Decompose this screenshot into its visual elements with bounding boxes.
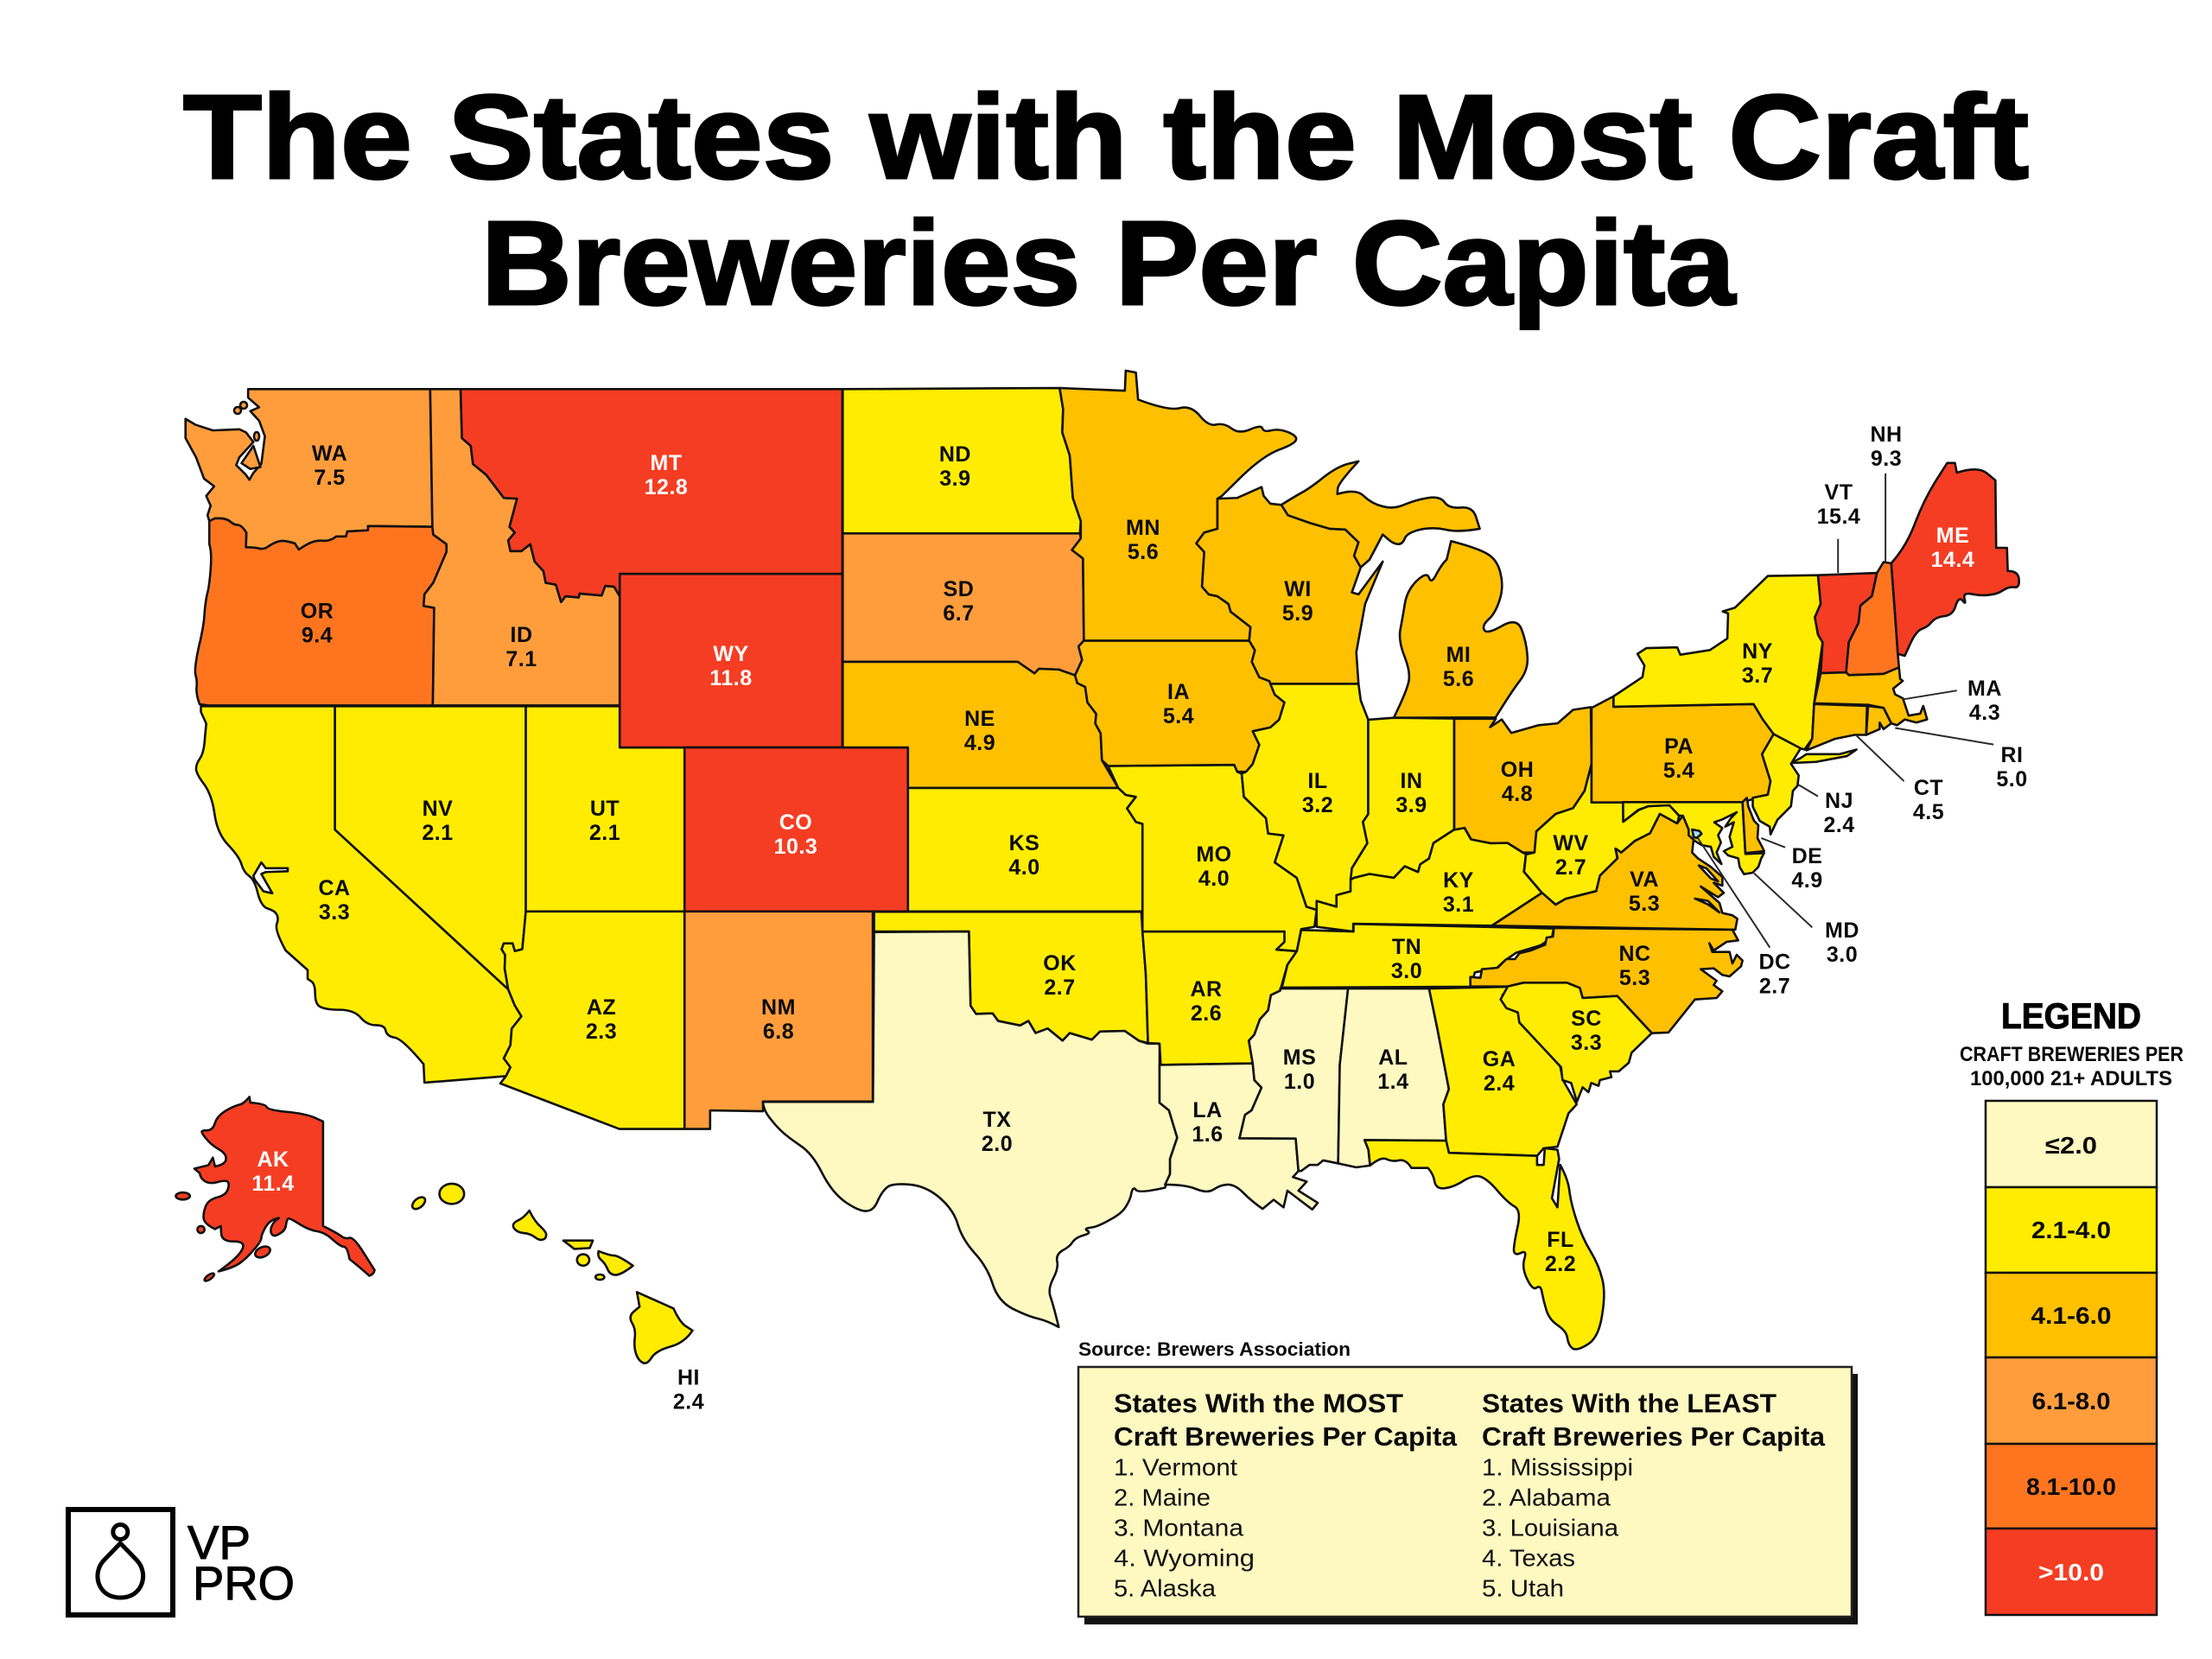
state: Illinois: 3.2 — [1302, 793, 1333, 817]
state: Illinois: IL — [1307, 769, 1328, 793]
state: Rhode Island with leader line: RI — [2001, 743, 2024, 767]
state: Vermont with leader line: 15.4 — [1817, 505, 1860, 529]
state: Alabama: 1.4 — [1377, 1070, 1409, 1094]
state: Iowa: 5.4 — [1163, 704, 1194, 728]
state: Arizona: AZ — [587, 995, 616, 1020]
state: North Carolina: NC — [1618, 942, 1651, 966]
state: Hawaii — [410, 1184, 704, 1414]
column: states with the most: 4. Wyoming — [1114, 1545, 1255, 1571]
state: Ohio: 4.8 — [1502, 782, 1533, 806]
logo: VP PRO — [68, 1510, 295, 1615]
state: Virginia: 5.3 — [1629, 892, 1660, 916]
state: Pennsylvania — [1592, 696, 1774, 803]
state: Connecticut with leader line: 4.5 — [1913, 800, 1944, 824]
state: Kentucky: 3.1 — [1443, 893, 1474, 917]
state: California: 3.3 — [319, 900, 350, 925]
district: DC with leader line — [1692, 830, 1791, 999]
state: North Dakota: 3.9 — [939, 467, 971, 491]
logo wordmark — [188, 1516, 295, 1610]
state: Idaho — [423, 389, 620, 705]
state: Florida: FL — [1547, 1228, 1574, 1252]
state: Oklahoma — [874, 912, 1148, 1043]
state: Indiana: IN — [1400, 769, 1422, 793]
legend colour scale: ≤2.0 — [2045, 1132, 2097, 1159]
state: Hawaii: HI — [677, 1365, 700, 1389]
state: Montana — [461, 389, 842, 602]
state: Pennsylvania: PA — [1664, 734, 1694, 759]
state: Alaska — [175, 1096, 375, 1282]
state: South Dakota: 6.7 — [943, 601, 975, 626]
column: states with the least — [1482, 1388, 1826, 1602]
state: New Jersey with leader line: NJ — [1825, 789, 1853, 813]
state: Nebraska: NE — [964, 707, 995, 731]
state: Connecticut with leader line — [1807, 704, 1944, 824]
state: Washington: WA — [312, 442, 347, 466]
state: New York — [1613, 575, 1857, 763]
state: Utah: UT — [590, 797, 620, 821]
legend colour scale: 6.1-8.0 — [2032, 1388, 2110, 1414]
state: Massachusetts with leader line: MA — [1967, 677, 2002, 701]
state: Georgia: GA — [1483, 1047, 1516, 1071]
state: Montana: 12.8 — [645, 475, 688, 499]
state: Pennsylvania: 5.4 — [1663, 759, 1694, 783]
state: Idaho: ID — [510, 623, 532, 647]
district: DC with leader line: DC — [1758, 950, 1791, 975]
state: Montana: MT — [650, 451, 683, 475]
state: New York: 3.7 — [1742, 664, 1773, 688]
state: Florida — [1364, 1140, 1604, 1349]
state: Nevada: NV — [423, 797, 453, 821]
state: Missouri: MO — [1196, 842, 1232, 867]
state: New York: NY — [1742, 639, 1773, 664]
legend subtitle: 100,000 21+ ADULTS — [1970, 1067, 2172, 1090]
state: South Carolina: 3.3 — [1571, 1031, 1602, 1055]
state: New Mexico: 6.8 — [763, 1020, 794, 1044]
state: Virginia: VA — [1630, 868, 1659, 892]
state: West Virginia — [1524, 764, 1679, 905]
state: California — [196, 706, 521, 1083]
state: Colorado: 10.3 — [774, 835, 817, 859]
state: New Mexico — [684, 912, 873, 1129]
state: Texas — [763, 931, 1177, 1327]
state: Maine: ME — [1936, 524, 1969, 548]
state: Wisconsin: WI — [1284, 577, 1312, 601]
state: Arkansas — [1142, 931, 1297, 1065]
state: South Dakota — [842, 533, 1084, 676]
state: Arizona: 2.3 — [586, 1020, 617, 1044]
state: North Dakota: ND — [939, 442, 971, 467]
state: Alaska: 11.4 — [251, 1172, 295, 1196]
state: Delaware with leader line: DE — [1792, 844, 1822, 868]
state: New Mexico: NM — [761, 995, 796, 1020]
state: Michigan: MI — [1446, 643, 1471, 667]
state: Indiana: 3.9 — [1395, 793, 1427, 817]
legend colour scale: 4.1-6.0 — [2031, 1302, 2112, 1329]
legend subtitle: CRAFT BREWERIES PER — [1960, 1043, 2183, 1066]
state: Maine: 14.4 — [1931, 548, 1974, 572]
column: states with the least: 5. Utah — [1482, 1574, 1564, 1602]
state: Massachusetts with leader line — [1815, 667, 2002, 725]
state: Alaska: AK — [257, 1147, 289, 1172]
state: Washington — [186, 389, 432, 550]
column: states with the most — [1114, 1388, 1458, 1602]
panel box — [1078, 1367, 1852, 1617]
state: Rhode Island with leader line: 5.0 — [1996, 767, 2028, 791]
state: Texas: 2.0 — [982, 1132, 1013, 1156]
panel shadow — [1084, 1374, 1858, 1624]
state: New Hampshire with leader line: 9.3 — [1871, 447, 1902, 471]
state: Kansas: 4.0 — [1008, 855, 1040, 880]
state: Minnesota — [1059, 371, 1296, 640]
column: states with the most: 5. Alaska — [1114, 1574, 1216, 1602]
title: Breweries Per Capita — [481, 197, 1736, 330]
state: Florida: 2.2 — [1545, 1252, 1576, 1276]
state: Illinois — [1242, 683, 1368, 910]
state: Colorado — [684, 747, 908, 912]
state: Vermont with leader line: VT — [1825, 480, 1853, 505]
column: states with the most: 3. Montana — [1114, 1514, 1243, 1541]
source note: Source: Brewers Association — [1078, 1338, 1351, 1360]
map of the United States — [175, 371, 2028, 1414]
state: Missouri — [1108, 765, 1317, 951]
state: Minnesota: 5.6 — [1128, 540, 1159, 564]
state: Louisiana: 1.6 — [1192, 1122, 1224, 1147]
state: Georgia: 2.4 — [1484, 1071, 1515, 1096]
state: Washington: 7.5 — [314, 466, 346, 490]
state: South Dakota: SD — [944, 577, 974, 601]
state: California: CA — [318, 876, 351, 900]
state: Louisiana — [1160, 1064, 1318, 1210]
state: Alabama: AL — [1378, 1046, 1408, 1070]
state: New Jersey with leader line — [1753, 734, 1855, 837]
state: Kansas — [908, 788, 1142, 912]
legend colour scale — [1986, 1101, 2157, 1615]
state: Alabama — [1338, 988, 1449, 1167]
column: states with the least: 3. Louisiana — [1482, 1514, 1618, 1541]
column: states with the least: 4. Texas — [1482, 1545, 1575, 1571]
state: Wyoming — [620, 574, 842, 747]
state: Texas: TX — [983, 1108, 1011, 1132]
column: states with the most: 1. Vermont — [1114, 1453, 1237, 1481]
column: states with the most: Craft Breweries Per Capita — [1114, 1421, 1458, 1452]
logo frame — [68, 1510, 173, 1615]
state: Nevada — [335, 706, 526, 989]
state: Oregon — [195, 518, 447, 705]
column: states with the least: 1. Mississippi — [1482, 1453, 1633, 1481]
state: Utah — [526, 706, 684, 912]
state: Maine — [1891, 463, 2019, 656]
state: Tennessee — [1282, 924, 1554, 988]
state: Vermont with leader line — [1815, 480, 1877, 673]
state: Maryland with leader line: 3.0 — [1827, 943, 1858, 967]
state: Wyoming: WY — [713, 642, 749, 666]
legend — [1960, 995, 2183, 1615]
column: states with the least: Craft Breweries Per Capita — [1482, 1421, 1826, 1452]
state: Mississippi — [1239, 988, 1348, 1171]
state: Arizona — [500, 912, 684, 1129]
district: DC with leader line: 2.7 — [1759, 975, 1790, 999]
state: West Virginia: WV — [1553, 831, 1589, 855]
state: Louisiana: LA — [1192, 1098, 1223, 1122]
state: Georgia — [1429, 987, 1577, 1156]
state: Arkansas: 2.6 — [1191, 1001, 1222, 1026]
state: Tennessee: 3.0 — [1391, 959, 1422, 983]
state: Kentucky: KY — [1443, 868, 1474, 893]
state: Massachusetts with leader line: 4.3 — [1969, 701, 2000, 725]
state: Nebraska: 4.9 — [964, 731, 995, 755]
state: Kentucky — [1317, 828, 1541, 931]
state: Ohio: OH — [1501, 758, 1534, 782]
state: Nevada: 2.1 — [422, 821, 454, 845]
state: Arkansas: AR — [1190, 977, 1223, 1001]
state: Nebraska — [842, 662, 1118, 788]
state: Iowa: IA — [1167, 680, 1190, 704]
legend colour scale: 2.1-4.0 — [2031, 1217, 2111, 1243]
state: New Jersey with leader line: 2.4 — [1823, 813, 1855, 837]
state: Mississippi: MS — [1283, 1046, 1316, 1070]
state: Michigan — [1281, 461, 1528, 718]
state: Wyoming: 11.8 — [709, 666, 753, 690]
state: Delaware with leader line — [1743, 798, 1823, 893]
state: Connecticut with leader line: CT — [1914, 776, 1943, 800]
legend colour scale: >10.0 — [2038, 1559, 2104, 1586]
state: Wisconsin: 5.9 — [1282, 601, 1313, 626]
state: Mississippi: 1.0 — [1284, 1070, 1315, 1094]
state: Virginia — [1492, 814, 1738, 930]
column: states with the most: States With the MOST — [1114, 1388, 1403, 1419]
icon: drop with loop — [98, 1524, 143, 1598]
state: Delaware with leader line: 4.9 — [1791, 868, 1823, 893]
state: Maryland with leader line — [1623, 802, 1859, 967]
state: North Carolina: 5.3 — [1619, 966, 1650, 990]
legend colour scale: 8.1-10.0 — [2026, 1473, 2116, 1500]
state: Tennessee: TN — [1392, 935, 1421, 959]
state: Oklahoma: OK — [1043, 951, 1077, 976]
logo wordmark: VP — [188, 1516, 251, 1569]
state: Colorado: CO — [779, 810, 812, 835]
state: South Carolina — [1501, 982, 1652, 1102]
state: North Dakota — [842, 388, 1081, 533]
column: states with the most: 2. Maine — [1114, 1484, 1211, 1510]
panel: most and least rankings — [1078, 1367, 1858, 1624]
state: New Hampshire with leader line — [1847, 423, 1903, 675]
state: Oregon: 9.4 — [302, 624, 333, 648]
state: Minnesota: MN — [1126, 516, 1160, 540]
logo wordmark: PRO — [193, 1556, 295, 1610]
state: North Carolina — [1471, 928, 1743, 1033]
state: Wisconsin — [1196, 487, 1382, 683]
title — [183, 71, 2029, 330]
state: Iowa — [1075, 640, 1285, 772]
state: New Hampshire with leader line: NH — [1870, 423, 1903, 447]
state: Maryland with leader line: MD — [1825, 918, 1859, 943]
legend subtitle — [1960, 1043, 2183, 1090]
legend heading: LEGEND — [2001, 995, 2141, 1036]
state: West Virginia: 2.7 — [1555, 855, 1586, 880]
state: Oklahoma: 2.7 — [1044, 976, 1076, 1000]
state: Idaho: 7.1 — [505, 647, 537, 671]
column: states with the least: 2. Alabama — [1482, 1484, 1611, 1510]
state: Kansas: KS — [1009, 831, 1039, 855]
state: Oregon: OR — [301, 600, 334, 624]
state: Indiana — [1351, 718, 1454, 880]
column: states with the least: States With the LEAST — [1482, 1388, 1777, 1419]
state: South Carolina: SC — [1571, 1007, 1602, 1031]
title: The States with the Most Craft — [183, 71, 2029, 204]
state: Ohio — [1454, 707, 1592, 853]
state: Utah: 2.1 — [589, 821, 620, 845]
state: Missouri: 4.0 — [1198, 867, 1230, 891]
state: Hawaii: 2.4 — [673, 1389, 704, 1414]
state: Rhode Island with leader line — [1866, 706, 2028, 791]
state: Michigan: 5.6 — [1443, 667, 1474, 691]
